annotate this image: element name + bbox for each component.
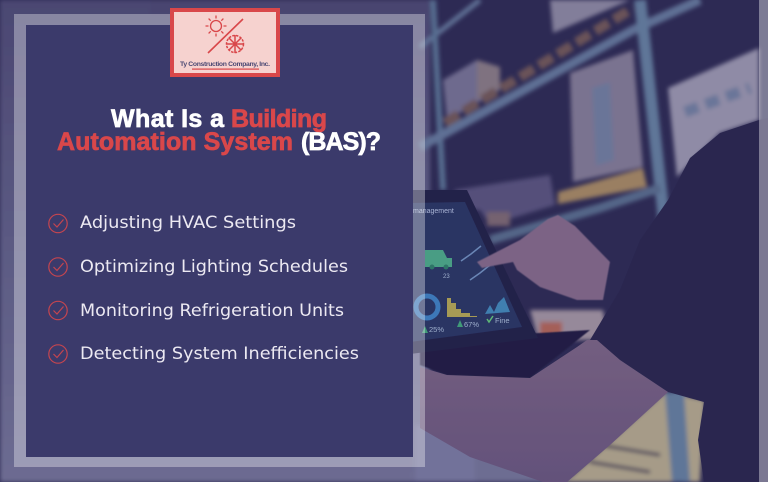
item: detecting system inefficiencies: Detecting System Inefficiencies [80, 344, 359, 363]
person shirt [590, 118, 768, 482]
company name: Ty Construction Company, Inc. [180, 61, 270, 68]
icon: snowflake [226, 35, 244, 53]
tablet: Fine [495, 316, 510, 325]
title: Building [231, 105, 327, 133]
item: optimizing lighting schedules: Optimizing Lighting Schedules [80, 257, 348, 276]
title: Automation System [57, 128, 293, 156]
right translucent strip [759, 0, 768, 482]
tablet [410, 190, 538, 354]
arm [420, 340, 668, 482]
tablet: 23 [443, 274, 450, 280]
tablet: management [413, 208, 454, 215]
item: adjusting HVAC settings: Adjusting HVAC Settings [80, 213, 296, 232]
hand [477, 215, 610, 300]
title [57, 105, 381, 156]
title: (BAS)? [301, 128, 381, 156]
title: What Is a [111, 105, 225, 133]
tablet: 67% [464, 320, 479, 329]
panel: main navy card [26, 25, 413, 457]
diagonal slash [208, 19, 243, 53]
translucent frame around panel [14, 14, 425, 467]
logo badge [172, 10, 278, 75]
icon: sun [206, 16, 226, 36]
tablet: 25% [429, 325, 444, 334]
item: monitoring refrigeration units: Monitoring Refrigeration Units [80, 301, 344, 320]
checklist [49, 213, 359, 363]
logo underline [192, 68, 259, 70]
shadow below tablet [420, 330, 590, 378]
